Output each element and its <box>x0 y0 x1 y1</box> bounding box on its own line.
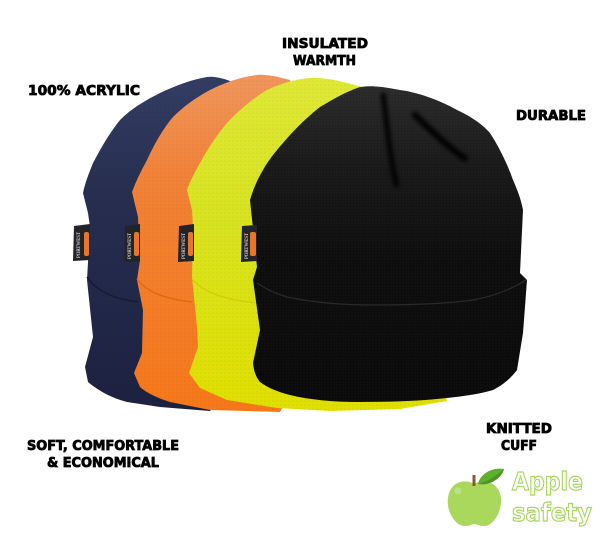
logo wordmark: safety <box>512 498 592 527</box>
label: soft, comfortable & economical: & ECONOMICAL <box>47 455 159 471</box>
label: knitted cuff: KNITTED <box>486 421 552 437</box>
label: insulated warmth <box>282 36 368 69</box>
label: insulated warmth: INSULATED <box>282 36 368 52</box>
label: insulated warmth: WARMTH <box>293 53 356 69</box>
tag: orange hat: PORTWEST <box>128 233 133 259</box>
icon: green apple <box>448 469 504 526</box>
logo wordmark <box>512 467 592 527</box>
hat: orange <box>132 75 340 412</box>
label: soft, comfortable & economical: SOFT, COMFORTABLE <box>27 438 179 454</box>
tag: navy hat: PORTWEST <box>77 232 82 258</box>
label: knitted cuff <box>486 421 552 454</box>
logo: apple safety <box>448 467 592 527</box>
label: durable: DURABLE <box>516 108 586 124</box>
label: soft, comfortable & economical <box>27 438 179 471</box>
tag: navy hat <box>73 224 90 261</box>
tag: yellow hat: PORTWEST <box>182 233 187 259</box>
label: 100% acrylic: 100% ACRYLIC <box>28 83 140 99</box>
hat: black <box>250 86 527 402</box>
logo wordmark: Apple <box>512 467 583 496</box>
hat: navy <box>83 77 300 411</box>
tag: black hat <box>241 225 257 262</box>
tag: orange hat <box>124 224 140 262</box>
hat: yellow <box>187 78 447 411</box>
tag: black hat: PORTWEST <box>245 233 250 259</box>
tag: yellow hat <box>178 224 194 262</box>
label: knitted cuff: CUFF <box>501 438 537 454</box>
